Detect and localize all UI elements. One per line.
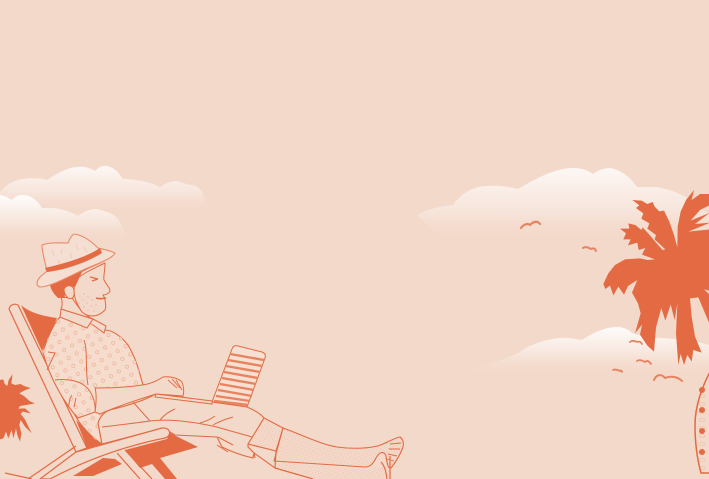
straw hat: [37, 234, 115, 287]
patterned shirt: [43, 309, 160, 444]
deck chair: [5, 304, 198, 479]
bird: [630, 341, 642, 344]
stubble: [78, 293, 97, 312]
trousers and thighs: [98, 393, 264, 458]
palm tree: right: [603, 190, 709, 365]
shirt collar: [60, 309, 106, 333]
chair shadow: left: [73, 458, 122, 476]
small palm tree: left: [0, 374, 35, 442]
forearm and hand: [95, 377, 184, 414]
bird: [637, 360, 651, 364]
cloud: upper right: [417, 168, 709, 242]
cloud: upper left: [0, 166, 212, 212]
laptop screen: [212, 346, 265, 407]
eye and mouth: [90, 277, 98, 281]
shirt sleeve folds: [47, 340, 95, 418]
chair armrest: [40, 428, 170, 479]
neck and face: [61, 263, 110, 319]
laptop base: [155, 394, 212, 404]
man relaxing with laptop: [37, 234, 403, 479]
chair canvas: back: [21, 305, 57, 351]
birds: [521, 222, 682, 381]
near lower leg: [274, 428, 403, 468]
chair shadow: right: [125, 433, 198, 479]
surfboard: [695, 372, 709, 473]
rolled trouser cuffs: [248, 418, 283, 451]
hair: [50, 262, 104, 298]
bird: [583, 247, 596, 251]
head: [37, 234, 115, 319]
far lower leg: [275, 456, 390, 479]
bird: [521, 222, 540, 228]
cloud: lower right: [458, 327, 709, 375]
chair back rail: [9, 304, 87, 452]
bird: [654, 375, 682, 381]
bird: [613, 370, 622, 372]
cloud: lower left: [0, 195, 132, 242]
ear: [64, 286, 74, 299]
chair legs: [5, 446, 152, 479]
chair canvas: seat: [76, 420, 102, 450]
